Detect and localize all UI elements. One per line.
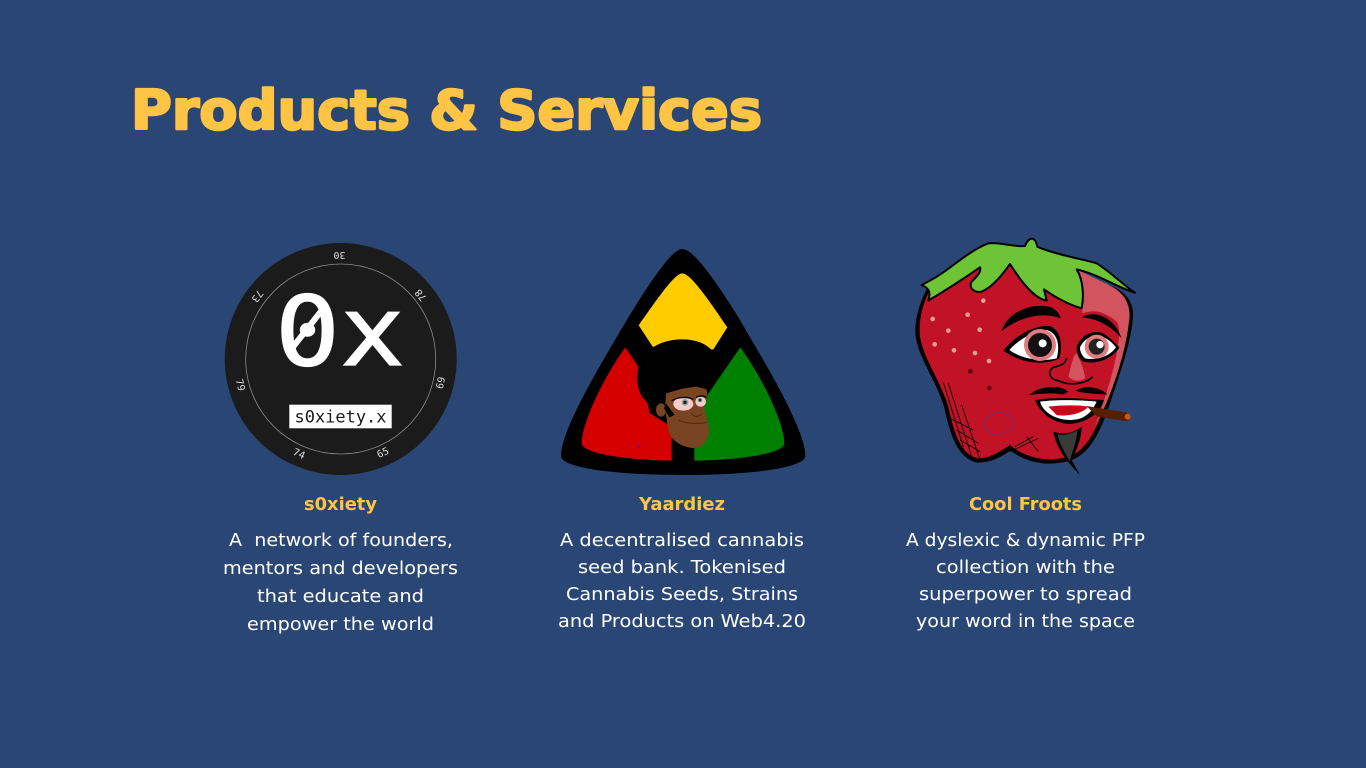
panel: Cool Froots: [906, 239, 1145, 632]
panel: s0xiety: [223, 243, 458, 635]
text block: Yaardiez description: [558, 530, 806, 632]
text block: Cool Froots description: A dyslexic & dynamic PFP: [906, 530, 1145, 551]
icon: s0xiety logo: 78: [413, 287, 429, 303]
title: Products & Services: [131, 79, 762, 142]
icon: s0xiety logo: 79: [233, 378, 246, 392]
text block: s0xiety description: empower the world: [247, 614, 434, 635]
panel: Yaardiez: [558, 249, 806, 632]
icon: s0xiety logo: 30: [333, 249, 346, 260]
text block: s0xiety description: A network of founders,: [229, 530, 453, 551]
text block: Cool Froots description: collection with the: [936, 557, 1115, 578]
icon: Cool Froots strawberry: [915, 239, 1135, 475]
text block: Yaardiez description: seed bank. Tokenised: [578, 557, 786, 578]
text block: Yaardiez description: Cannabis Seeds, Strains: [566, 584, 798, 605]
icon: s0xiety logo: 73: [249, 288, 265, 304]
text block: Cool Froots description: your word in the space: [916, 611, 1135, 632]
text block: Cool Froots description: [906, 530, 1145, 632]
icon: s0xiety logo: 74: [291, 447, 307, 462]
heading: Yaardiez: Yaardiez: [638, 494, 725, 515]
text block: Yaardiez description: A decentralised cannabis: [560, 530, 804, 551]
text block: s0xiety description: [223, 530, 458, 635]
text block: Cool Froots description: superpower to spread: [919, 584, 1132, 605]
icon: s0xiety logo: 0x: [275, 276, 405, 388]
icon: s0xiety logo: [225, 243, 457, 475]
text block: s0xiety description: mentors and developers: [223, 558, 458, 579]
heading: s0xiety: s0xiety: [304, 494, 377, 515]
icon: s0xiety logo: 65: [375, 446, 391, 461]
icon: s0xiety logo: s0xiety.x: [294, 408, 386, 428]
text block: Yaardiez description: and Products on Web4.20: [558, 611, 806, 632]
text block: s0xiety description: that educate and: [257, 586, 424, 607]
heading: Cool Froots: Cool Froots: [969, 494, 1082, 515]
icon: Yaardiez logo: [561, 249, 805, 475]
icon: s0xiety logo: 69: [435, 376, 448, 390]
